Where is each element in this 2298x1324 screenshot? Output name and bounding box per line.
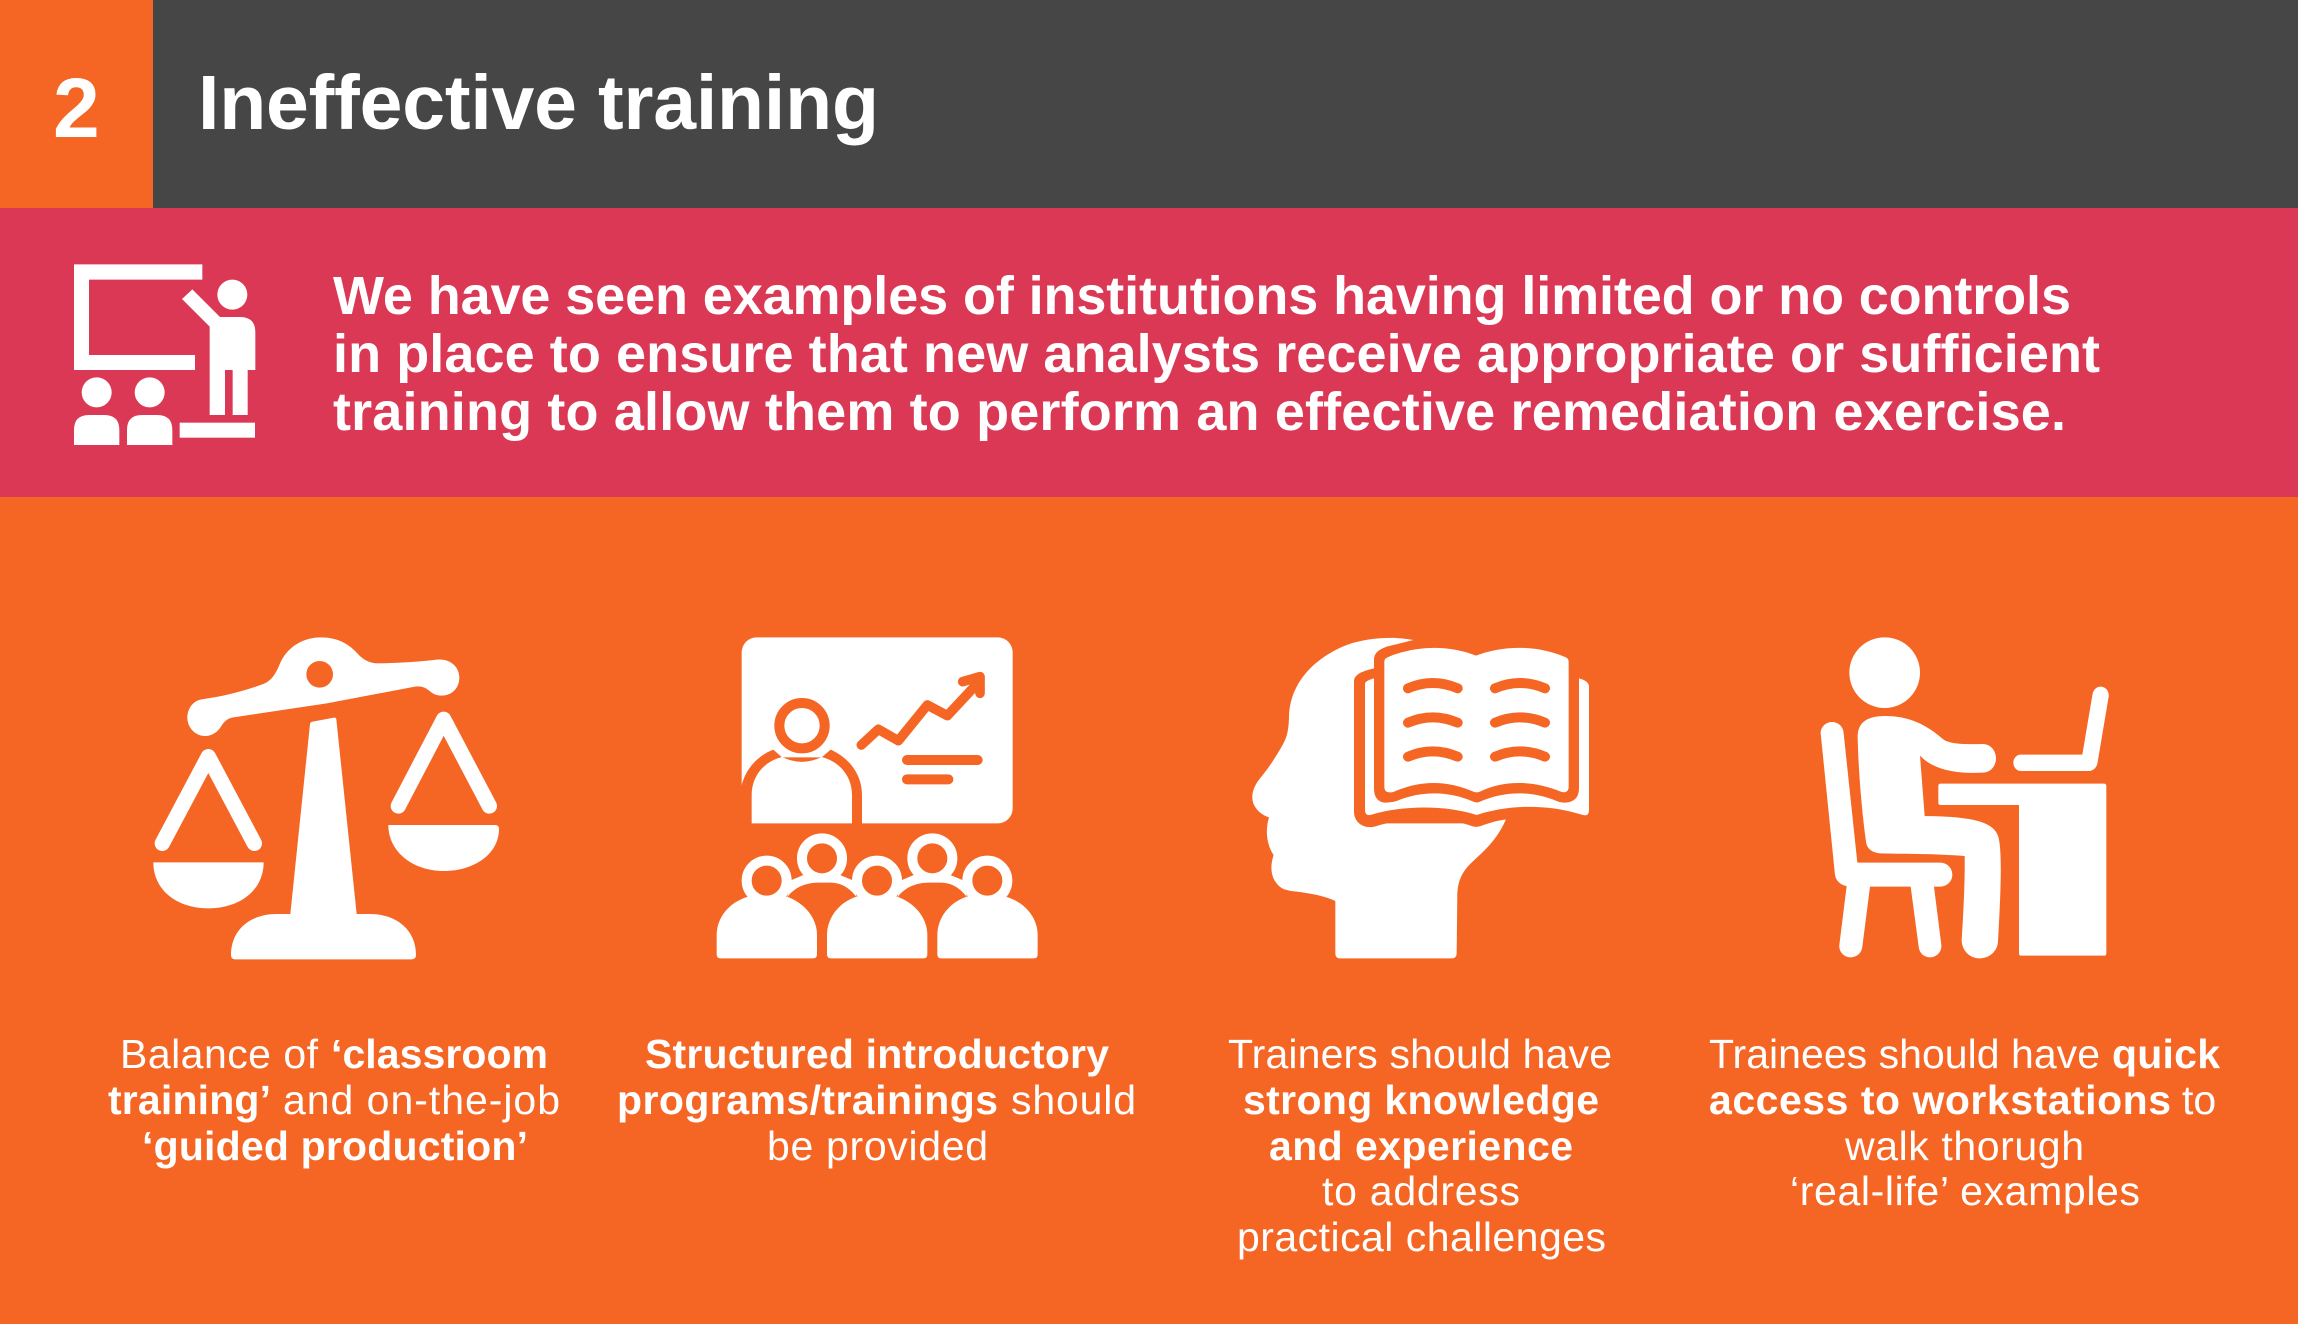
caption: trainers knowledge and experience <box>1228 1031 1612 1260</box>
caption: trainees access to workstations: walk thorugh <box>1844 1123 2084 1169</box>
icon: teacher at board with students <box>74 264 255 445</box>
title: Ineffective training <box>198 60 879 146</box>
icon: presenter with chart and audience <box>717 637 1038 960</box>
caption: trainers knowledge and experience: and experience <box>1269 1123 1573 1169</box>
section number: 2 <box>53 61 100 155</box>
caption: trainers knowledge and experience: strong knowledge <box>1243 1077 1599 1123</box>
intro text: training to allow them to perform an effective remediation exercise. <box>333 382 2066 442</box>
icon: balance scales <box>153 637 499 959</box>
intro background <box>0 208 2298 497</box>
caption: structured introductory programs <box>617 1031 1136 1169</box>
caption: structured introductory programs: programs/trainings <box>617 1077 998 1123</box>
caption: classroom and guided production <box>108 1031 560 1169</box>
caption: classroom and guided production: ‘guided production’ <box>142 1123 528 1169</box>
caption: trainees access to workstations: ‘real-life’ examples <box>1790 1168 2140 1214</box>
caption: trainees access to workstations: access to workstations <box>1709 1077 2171 1123</box>
caption: trainers knowledge and experience: practical challenges <box>1237 1214 1606 1260</box>
caption: structured introductory programs: Structured introductory <box>645 1031 1109 1077</box>
caption: trainers knowledge and experience: Trainers should have <box>1228 1031 1612 1077</box>
caption: classroom and guided production: and on-the-job <box>283 1077 560 1123</box>
intro text <box>333 266 2100 442</box>
icon: head with open book <box>1252 638 1597 958</box>
caption: trainers knowledge and experience: to address <box>1322 1168 1520 1214</box>
number box <box>0 0 153 208</box>
title bar <box>153 0 2298 208</box>
caption: trainees access to workstations: Trainees should have <box>1709 1031 2100 1077</box>
caption: trainees access to workstations <box>1709 1031 2220 1214</box>
caption: structured introductory programs: should <box>1011 1077 1136 1123</box>
caption: structured introductory programs: be provided <box>767 1123 988 1169</box>
caption: trainees access to workstations: quick <box>2112 1031 2220 1077</box>
intro text: in place to ensure that new analysts receive appropriate or sufficient <box>333 324 2100 384</box>
icon: person seated at laptop <box>1821 637 2109 958</box>
intro panel <box>0 208 2298 497</box>
caption: classroom and guided production: training’ <box>108 1077 271 1123</box>
header: number and title <box>0 0 2298 208</box>
intro text: We have seen examples of institutions having limited or no controls <box>333 266 2071 326</box>
caption: trainees access to workstations: to <box>2182 1077 2216 1123</box>
main orange panel <box>0 497 2298 1324</box>
caption: classroom and guided production: Balance of <box>120 1031 319 1077</box>
caption: classroom and guided production: ‘classroom <box>331 1031 548 1077</box>
